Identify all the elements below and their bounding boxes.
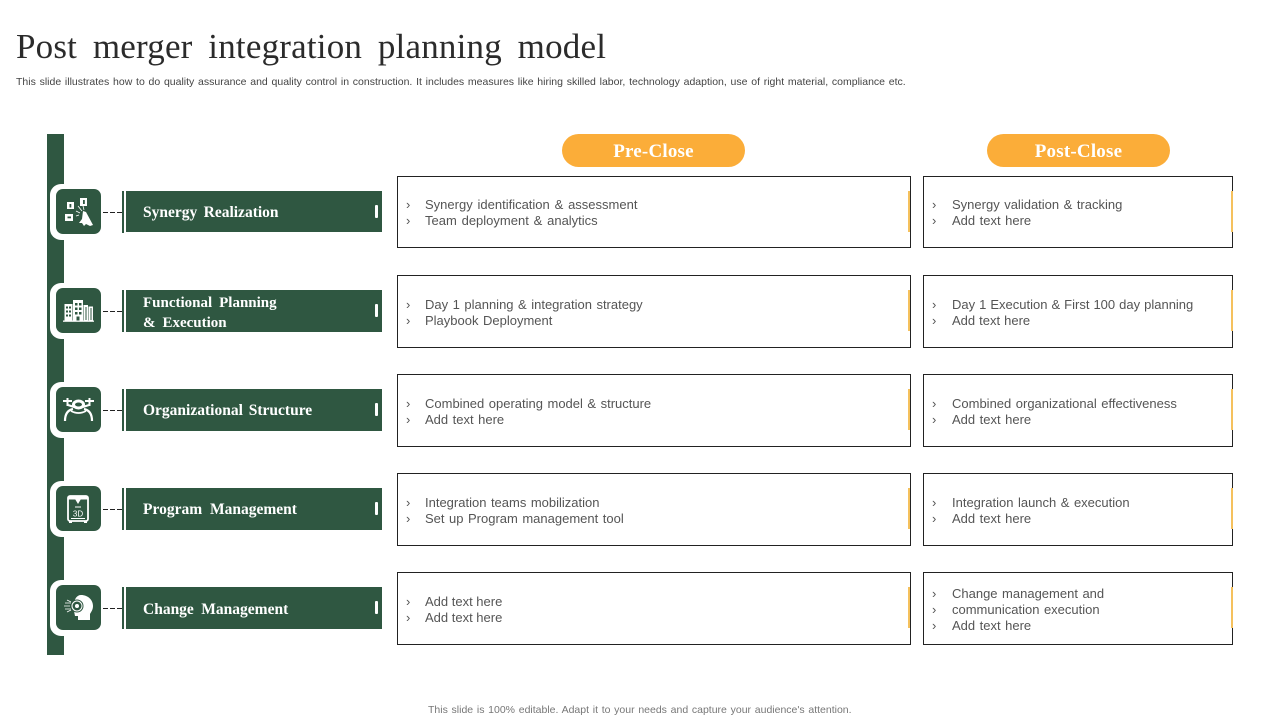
panel: Organizational pre-close: Combined operating model & structure [425, 396, 651, 411]
icon: head with gear [56, 585, 101, 630]
panel: Change pre-close: Add text here [425, 610, 502, 625]
panel: Synergy post-close [923, 176, 1233, 248]
row label: Functional Planning & Execution: Functional Planning [143, 295, 277, 311]
icon: drone [56, 387, 101, 432]
subtitle: This slide illustrates how to do quality assurance and quality control in construction. It includes measures like hiring skilled labor, technology adaption, use of right material, compliance etc. [16, 76, 906, 88]
panel: Synergy post-close: Add text here [952, 213, 1031, 228]
row label: Functional Planning & Execution [50, 283, 382, 339]
vertical rail [47, 134, 64, 655]
panel: Change post-close [923, 572, 1233, 645]
panel: Functional pre-close: Day 1 planning & integration strategy [425, 297, 643, 312]
footer note: This slide is 100% editable. Adapt it to your needs and capture your audience's attention. [428, 704, 852, 716]
panel: Functional pre-close: Playbook Deployment [425, 313, 552, 328]
row label: Program Management: Program Management [143, 501, 297, 518]
title: Post merger integration planning model [16, 27, 606, 66]
panel: Synergy post-close: Synergy validation & tracking [952, 197, 1122, 212]
row label: Functional Planning & Execution: & Execution [143, 315, 227, 331]
panel: Program pre-close: Integration teams mobilization [425, 495, 600, 510]
panel: Organizational pre-close [397, 374, 910, 447]
panel: Functional post-close [923, 275, 1233, 348]
panel: Synergy pre-close [397, 176, 910, 248]
row label: Change Management: Change Management [143, 601, 288, 618]
row label: Organizational Structure: Organizational Structure [143, 402, 312, 419]
row label: Change Management [50, 580, 382, 636]
column header: Pre-Close: Pre-Close [613, 141, 694, 162]
panel: Functional post-close: Day 1 Execution & First 100 day planning [952, 297, 1193, 312]
panel: Program post-close: Add text here [952, 511, 1031, 526]
panel: Organizational pre-close: Add text here [425, 412, 504, 427]
panel: Change post-close: Add text here [952, 618, 1031, 633]
panel: Organizational post-close: Add text here [952, 412, 1031, 427]
row label: Synergy Realization: Synergy Realization [143, 204, 279, 221]
icon: 3D printer: 3D [73, 510, 83, 518]
panel: Change post-close: communication execution [952, 602, 1100, 617]
panel: Change post-close: Change management and [952, 586, 1104, 601]
column header: Post-Close: Post-Close [1035, 141, 1122, 162]
row label: Synergy Realization [50, 184, 382, 240]
row label: Program Management [50, 481, 382, 537]
panel: Change pre-close [397, 572, 910, 645]
column header: Post-Close [987, 134, 1170, 167]
panel: Functional post-close: Add text here [952, 313, 1030, 328]
panel: Program pre-close [397, 473, 910, 546]
panel: Program post-close [923, 473, 1233, 546]
icon: office buildings [56, 288, 101, 333]
icon: social media megaphone [56, 189, 101, 234]
panel: Organizational post-close: Combined organizational effectiveness [952, 396, 1177, 411]
row label: Organizational Structure [50, 382, 382, 438]
column header: Pre-Close [562, 134, 745, 167]
panel: Synergy pre-close: Synergy identification & assessment [425, 197, 637, 212]
panel: Organizational post-close [923, 374, 1233, 447]
panel: Synergy pre-close: Team deployment & analytics [425, 213, 598, 228]
panel: Program post-close: Integration launch & execution [952, 495, 1130, 510]
panel: Change pre-close: Add text here [425, 594, 502, 609]
panel: Functional pre-close [397, 275, 910, 348]
icon: 3D printer [56, 486, 101, 531]
panel: Program pre-close: Set up Program management tool [425, 511, 624, 526]
